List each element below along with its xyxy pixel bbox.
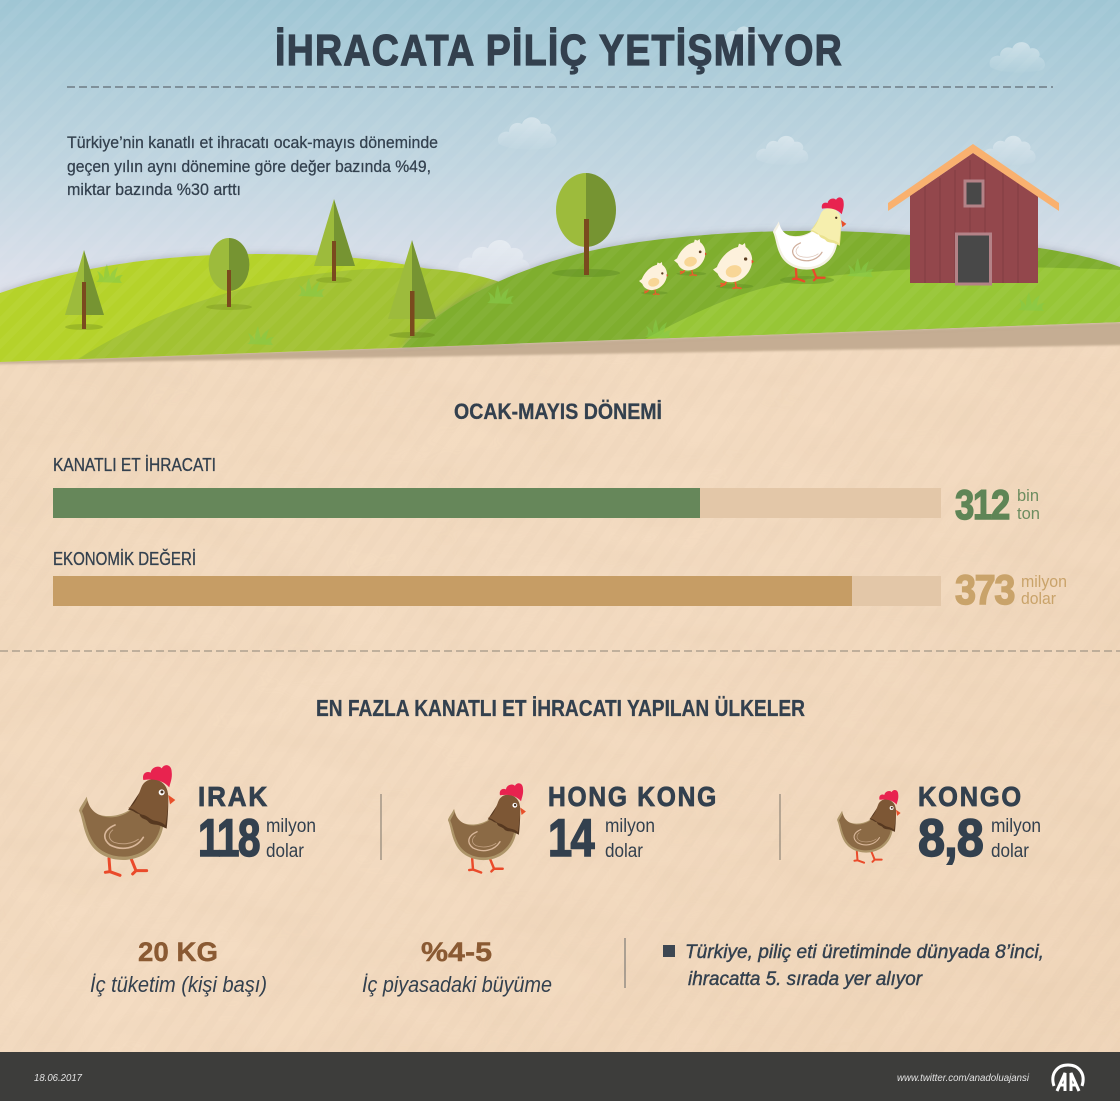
note: ihracatta 5. sırada yer alıyor xyxy=(688,969,923,990)
barn xyxy=(888,144,1059,284)
chart: kanatlı et ihracatı xyxy=(53,455,1040,528)
tree: cone 4 xyxy=(388,240,436,338)
panel: farm landscape xyxy=(0,0,1120,364)
title: İHRACATA PİLİÇ YETİŞMİYOR xyxy=(275,26,843,75)
country: Irak: dolar xyxy=(266,841,305,862)
icon: brown hen xyxy=(79,765,175,875)
country: Irak xyxy=(79,765,316,875)
chart: ekonomik değeri: EKONOMİK DEĞERİ xyxy=(53,548,196,569)
stat: per-capita consumption: 20 KG xyxy=(138,937,218,967)
note xyxy=(663,942,1044,990)
footer bar xyxy=(0,1052,1120,1101)
front hill xyxy=(645,267,1120,339)
third hill xyxy=(402,231,1120,348)
country: Irak: 118 xyxy=(198,809,259,868)
country: Kongo: KONGO xyxy=(918,781,1023,812)
white hen xyxy=(773,197,846,284)
country: Hong Kong xyxy=(448,781,718,873)
clouds xyxy=(458,27,1045,280)
intro text: Türkiye’nin kanatlı et ihracatı ocak-mayıs döneminde xyxy=(67,133,438,152)
sky xyxy=(0,0,1120,362)
country: Hong Kong: dolar xyxy=(605,841,644,862)
grass tufts xyxy=(96,258,1045,345)
stat: per-capita consumption: İç tüketim (kişi başı) xyxy=(90,972,267,997)
hill stripes xyxy=(0,0,1120,362)
stat: per-capita consumption xyxy=(90,937,267,997)
chart: kanatlı et ihracatı: ton xyxy=(1017,504,1040,523)
country: Hong Kong: milyon xyxy=(605,816,655,837)
chick: medium xyxy=(674,239,707,276)
country: Kongo: dolar xyxy=(991,841,1030,862)
stat: domestic growth: İç piyasadaki büyüme xyxy=(362,972,552,997)
stat: domestic growth: %4-5 xyxy=(421,937,492,967)
country: Irak: milyon xyxy=(266,816,316,837)
chart: kanatlı et ihracatı: bin xyxy=(1017,486,1039,505)
note: Türkiye, piliç eti üretiminde dünyada 8’inci, xyxy=(685,942,1044,963)
barn window xyxy=(965,181,983,206)
heading: ocak-mayıs: OCAK-MAYIS DÖNEMİ xyxy=(454,399,662,424)
chick: small xyxy=(639,262,668,295)
barn door xyxy=(956,234,990,284)
chick: large xyxy=(713,243,754,289)
icon: brown hen xyxy=(448,783,526,873)
stat: domestic growth xyxy=(362,937,552,997)
logo: AA xyxy=(1053,1065,1083,1091)
tree: round 5 xyxy=(552,173,620,277)
intro text: geçen yılın aynı dönemine göre değer bazında %49, xyxy=(67,157,431,176)
icon: brown hen xyxy=(837,790,901,863)
tree: round 2 xyxy=(206,238,252,310)
chart: ekonomik değeri: milyon xyxy=(1021,572,1067,591)
heading: countries: EN FAZLA KANATLI ET İHRACATI YAPILAN ÜLKELER xyxy=(316,695,805,721)
country: Kongo xyxy=(837,781,1041,868)
chart: ekonomik değeri: dolar xyxy=(1021,589,1056,608)
country: Irak: IRAK xyxy=(198,781,269,812)
chart: kanatlı et ihracatı: 312 xyxy=(955,481,1009,528)
back hill xyxy=(0,254,520,362)
intro text xyxy=(67,133,438,199)
country: Kongo: 8,8 xyxy=(918,809,983,868)
middle hill xyxy=(78,268,520,359)
tree: cone 1 xyxy=(65,250,104,330)
country: Kongo: milyon xyxy=(991,816,1041,837)
footer bar: 18.06.2017 xyxy=(34,1072,83,1084)
country: Hong Kong: 14 xyxy=(548,809,595,868)
tree: cone 3 xyxy=(314,199,355,283)
intro text: miktar bazında %30 arttı xyxy=(67,180,241,199)
chart: kanatlı et ihracatı: KANATLI ET İHRACATI xyxy=(53,455,216,475)
footer bar: www.twitter.com/anadoluajansi xyxy=(897,1072,1030,1084)
chart: ekonomik değeri: 373 xyxy=(955,566,1014,613)
road shadow band xyxy=(0,322,1120,364)
chart: ekonomik değeri xyxy=(53,548,1067,613)
country: Hong Kong: HONG KONG xyxy=(548,781,718,812)
